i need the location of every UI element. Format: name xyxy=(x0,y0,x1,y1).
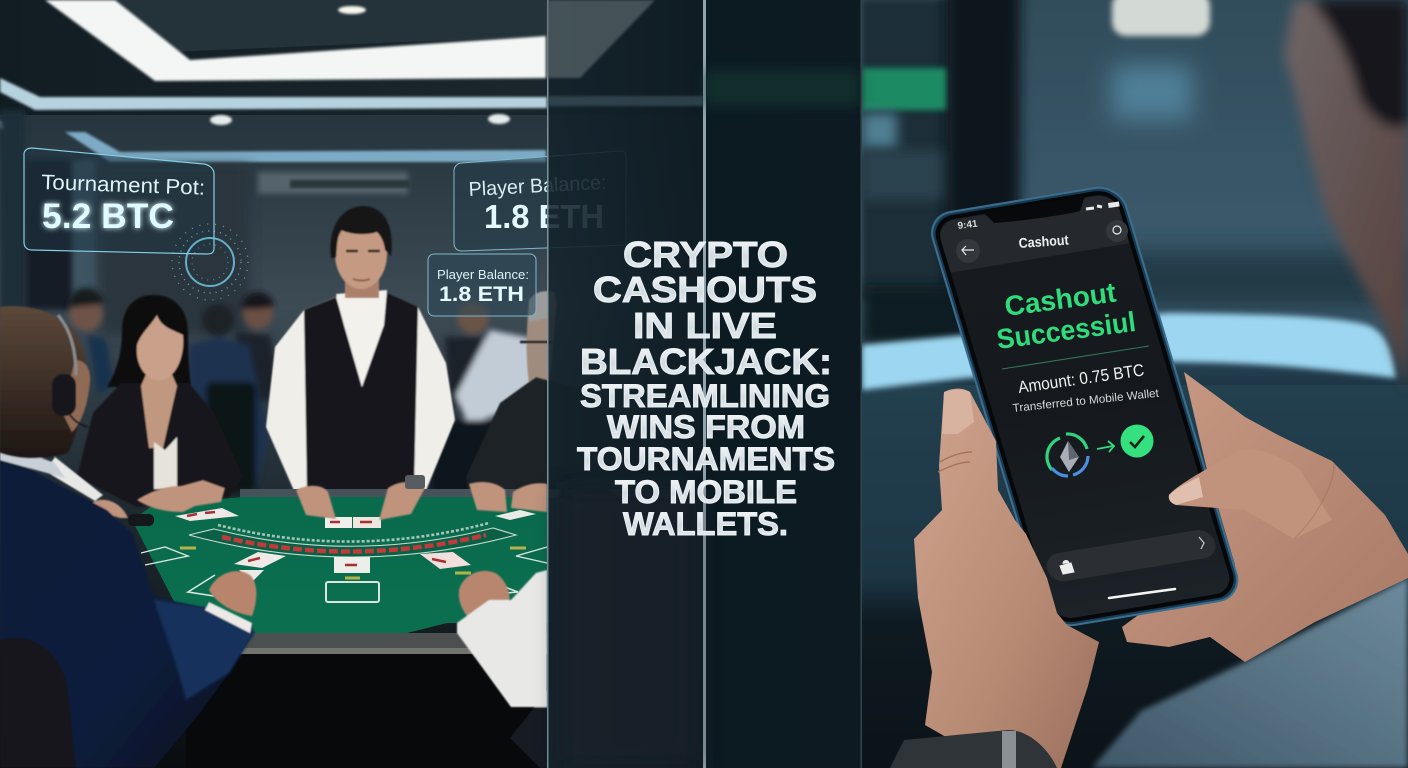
panel: phone hand back xyxy=(1122,372,1408,662)
person: dealer xyxy=(266,206,455,493)
phone notch xyxy=(982,196,1085,223)
person: foreground man in white shirt xyxy=(457,470,701,768)
panel: player balance small xyxy=(428,254,536,316)
title: TO MOBILE xyxy=(615,474,797,510)
phone divider xyxy=(1002,346,1149,369)
person: man with glasses xyxy=(466,291,680,503)
hands on the table xyxy=(137,480,547,520)
title: STREAMLINING xyxy=(580,378,830,414)
panel: player balance small: Player Balance: xyxy=(437,267,529,282)
title: TOURNAMENTS xyxy=(577,441,835,477)
playing cards xyxy=(175,508,536,582)
panel: holographic tournament pot: Tournament Pot: xyxy=(41,171,206,200)
icon: chevron xyxy=(1199,537,1204,549)
status bar: 9:41 xyxy=(957,219,979,232)
title: CASHOUTS xyxy=(593,269,817,310)
phone transfer note: Transferred to Mobile Wallet xyxy=(1012,388,1160,415)
panel: player balance large: Player Balance: xyxy=(468,172,607,201)
phone body xyxy=(926,184,1243,629)
title: BLACKJACK: xyxy=(580,341,832,382)
panel: left hand xyxy=(914,389,1099,768)
icon: ethereum ring xyxy=(1047,434,1088,476)
icon: mobile phone xyxy=(926,184,1243,629)
gold labels xyxy=(180,548,526,578)
phone success message: Successiul xyxy=(995,306,1138,355)
person: foreground man in navy suit xyxy=(0,306,256,768)
panel: center glass xyxy=(547,0,862,768)
icon: lock xyxy=(1060,560,1074,574)
phone bottom bar xyxy=(1043,528,1219,584)
blackjack table xyxy=(128,489,705,768)
title: IN LIVE xyxy=(633,305,777,346)
panel: player balance large: 1.8 ETH xyxy=(484,198,604,235)
icon: back button xyxy=(956,239,980,263)
table markings xyxy=(141,523,547,602)
person: sleeve xyxy=(1092,578,1408,768)
ceiling xyxy=(0,0,705,162)
panel: right thumb xyxy=(1169,450,1334,539)
icon: success check xyxy=(1120,424,1154,458)
back wall xyxy=(0,110,410,335)
panel: right background xyxy=(704,0,1408,768)
icon: particle ring xyxy=(172,224,248,300)
phone success message xyxy=(995,277,1138,355)
panel: holographic tournament pot: 5.2 BTC xyxy=(42,197,174,236)
dealer watch xyxy=(405,475,425,489)
title: CRYPTO xyxy=(623,234,788,275)
phone success message: Cashout xyxy=(1003,277,1118,322)
phone header xyxy=(936,193,1130,273)
panel: live blackjack room xyxy=(0,0,705,768)
phone home bar xyxy=(1109,589,1175,598)
person: blurred head xyxy=(1284,0,1408,392)
phone title: Cashout xyxy=(1018,232,1069,251)
title: WINS FROM xyxy=(607,409,805,445)
arrow xyxy=(1097,441,1114,452)
panel: holographic tournament pot xyxy=(24,148,214,254)
phone amount: Amount: 0.75 BTC xyxy=(1017,360,1145,397)
panel: player balance small: 1.8 ETH xyxy=(439,283,524,306)
status bar xyxy=(957,201,1120,232)
panel: player balance large xyxy=(454,151,626,251)
phone screen xyxy=(933,190,1237,623)
watch xyxy=(890,730,1057,768)
title: WALLETS. xyxy=(623,506,788,542)
blurred background guests xyxy=(68,288,550,495)
title xyxy=(577,234,835,542)
person: woman player xyxy=(77,295,243,507)
icon: help button xyxy=(1106,220,1128,242)
